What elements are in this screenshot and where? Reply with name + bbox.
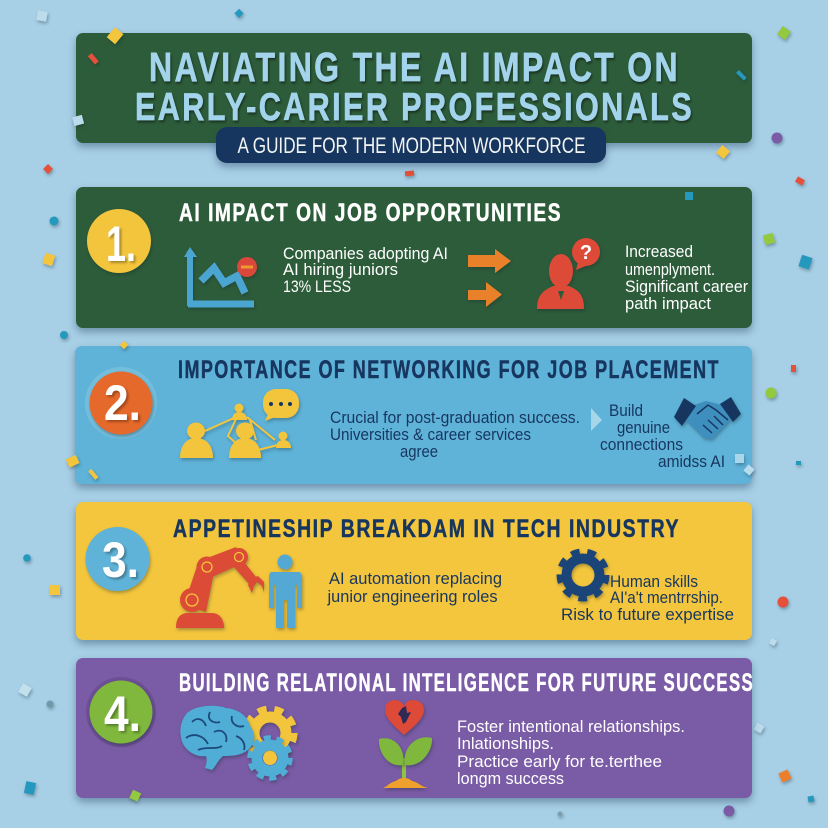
- subtitle pill: A GUIDE FOR THE MODERN WORKFORCE: [238, 133, 586, 158]
- text: increased unemployment: Increased: [625, 242, 693, 261]
- badge 1: 1.: [106, 216, 136, 272]
- arrow: pale triangle: [591, 408, 602, 431]
- text: increased unemployment: [625, 242, 748, 313]
- text: build connections: [600, 401, 725, 471]
- badge 4: 4.: [104, 686, 141, 742]
- confetti on panel 2: [66, 341, 755, 480]
- badge 1: [87, 209, 151, 273]
- text: foster relationships: Practice early for te.terthee: [457, 752, 662, 771]
- text: increased unemployment: Significant career: [625, 277, 748, 296]
- icon: person with question bubble: ?: [580, 242, 592, 264]
- badge 3: 3.: [102, 532, 139, 588]
- text: foster relationships: longm success: [457, 769, 564, 788]
- icon: human figure: [269, 554, 302, 628]
- arrows: [468, 249, 511, 307]
- badge 4: [86, 677, 156, 747]
- panel 1: AI impact on job opportunities: [76, 187, 752, 328]
- icon: handshake: [674, 397, 741, 439]
- icon: brain with gears: [180, 706, 294, 778]
- text: crucial for success: [330, 408, 580, 461]
- panel 3: apprenticeship breakdown: [76, 502, 752, 640]
- confetti on panel 4: [129, 790, 141, 802]
- text: crucial for success: Universities & career services: [330, 425, 531, 444]
- text: AI automation: junior engineering roles: [327, 587, 498, 606]
- heading 1: AI IMPACT ON JOB OPPORTUNITIES: [179, 199, 562, 227]
- text: human skills: Human skills: [610, 572, 698, 591]
- badge 3: [86, 527, 150, 591]
- icon: gear: [560, 552, 606, 598]
- icon: robot arm: [176, 547, 264, 628]
- panel 4: relational intelligence: [76, 658, 754, 802]
- panel 2: networking: [66, 341, 755, 484]
- text: AI automation: [327, 569, 502, 606]
- text: foster relationships: Foster intentional relationships.: [457, 717, 685, 736]
- text: foster relationships: Inlationships.: [457, 734, 554, 753]
- text: increased unemployment: umenplyment.: [625, 260, 715, 279]
- confetti square: [685, 192, 693, 200]
- icon: heart and sprout: [379, 700, 432, 788]
- icon: declining chart: [184, 247, 257, 306]
- confetti: on title: [72, 27, 747, 159]
- text: human skills: [561, 572, 734, 624]
- text: human skills: AI'a't mentrrship.: [610, 588, 723, 607]
- text: increased unemployment: path impact: [625, 294, 711, 313]
- icon: person with question bubble: [537, 238, 600, 309]
- panel: title banner: [76, 33, 752, 143]
- text: foster relationships: [457, 717, 685, 788]
- text: build connections: connections: [600, 435, 683, 454]
- text: build connections: amidss AI: [658, 452, 725, 471]
- title line 1: NAVIATING THE AI IMPACT ON: [149, 44, 680, 90]
- text: companies adopting AI: Companies adopting AI: [283, 244, 448, 263]
- text: AI automation: AI automation replacing: [329, 569, 502, 588]
- heading 3: APPETINESHIP BREAKDAM IN TECH INDUSTRY: [173, 515, 680, 543]
- badge 2: [85, 367, 157, 439]
- text: crucial for success: Crucial for post-graduation success.: [330, 408, 580, 427]
- subtitle pill: [216, 127, 606, 163]
- text: companies adopting AI: 13% LESS: [283, 277, 351, 296]
- title line 2: EARLY-CARIER PROFESSIONALS: [135, 86, 694, 129]
- icon: people network with speech bubble: [180, 389, 299, 458]
- text: build connections: genuine: [617, 418, 670, 437]
- text: human skills: Risk to future expertise: [561, 605, 734, 624]
- badge 2: 2.: [104, 375, 141, 431]
- text: companies adopting AI: AI hiring juniors: [283, 260, 398, 279]
- text: crucial for success: agree: [400, 442, 438, 461]
- text: companies adopting AI: [283, 244, 448, 296]
- text: build connections: Build: [609, 401, 643, 420]
